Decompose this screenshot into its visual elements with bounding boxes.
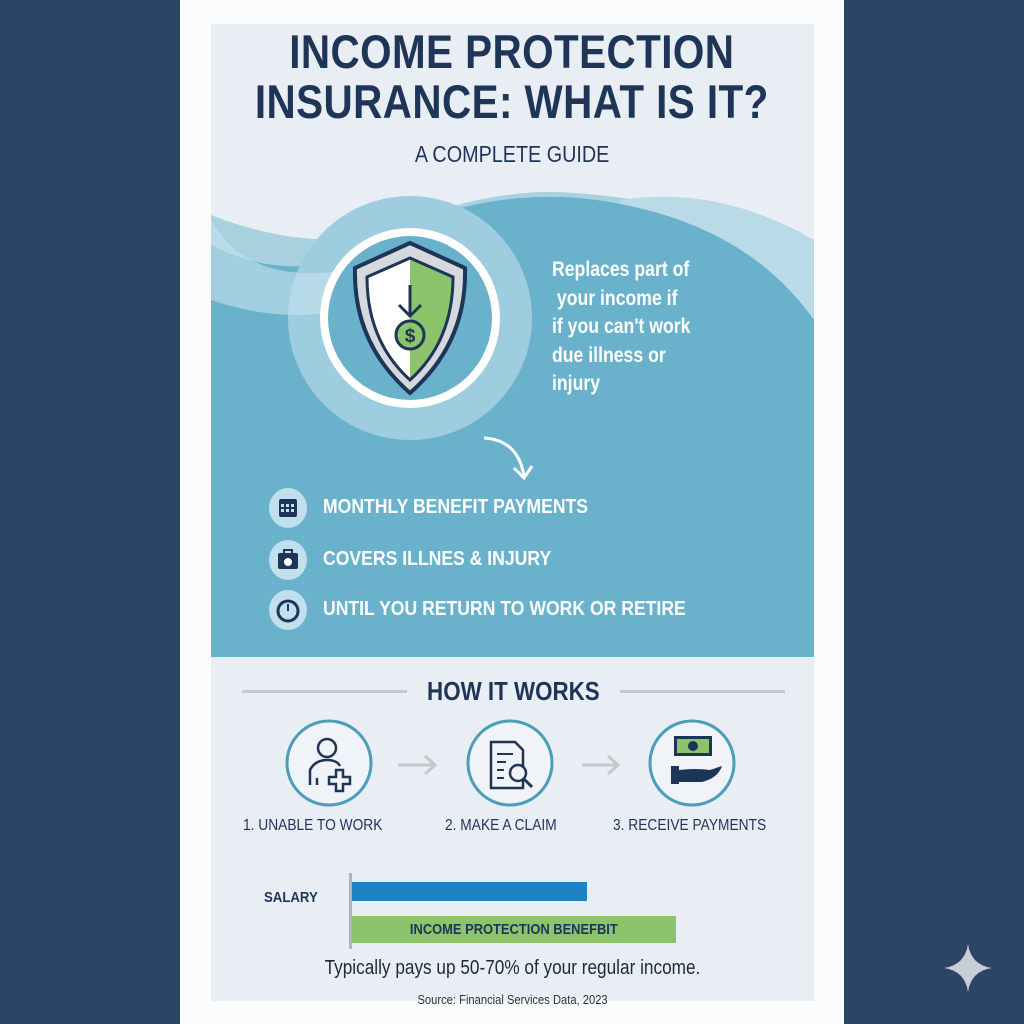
icon: shield: $ bbox=[405, 326, 416, 347]
white card bbox=[180, 0, 844, 1024]
text: description: Replaces part of bbox=[552, 258, 689, 281]
bar chart bbox=[264, 873, 676, 949]
arrow: curved bbox=[484, 436, 534, 480]
step labels: 2. MAKE A CLAIM bbox=[445, 817, 557, 834]
text: description: injury bbox=[552, 372, 600, 395]
caption: Typically pays up 50-70% of your regular income. bbox=[325, 957, 700, 979]
step 1 icon bbox=[287, 721, 371, 805]
text: description: due illness or bbox=[552, 344, 666, 366]
item: covers: COVERS ILLNES & INJURY bbox=[323, 548, 551, 570]
bar chart: INCOME PROTECTION BENEFBIT bbox=[410, 921, 618, 938]
item: monthly bbox=[269, 488, 588, 528]
title: INCOME PROTECTION bbox=[289, 25, 735, 78]
step labels bbox=[243, 817, 766, 834]
source: Source: Financial Services Data, 2023 bbox=[417, 992, 608, 1007]
text: description bbox=[552, 258, 690, 395]
steps bbox=[243, 720, 766, 834]
item: until bbox=[269, 590, 686, 630]
step labels: 1. UNABLE TO WORK bbox=[243, 817, 382, 834]
icon: shield bbox=[320, 228, 500, 408]
item: until: UNTIL YOU RETURN TO WORK OR RETIRE bbox=[323, 598, 686, 620]
title: INSURANCE: WHAT IS IT? bbox=[255, 75, 769, 128]
icon: sparkle bbox=[944, 944, 992, 992]
subtitle: A COMPLETE GUIDE bbox=[415, 141, 609, 167]
text: description: your income if bbox=[557, 286, 677, 310]
title bbox=[255, 25, 769, 128]
feature list bbox=[269, 488, 686, 630]
step 3 icon bbox=[650, 721, 734, 805]
item: covers bbox=[269, 540, 551, 580]
heading: how it works: HOW IT WORKS bbox=[427, 676, 600, 706]
step labels: 3. RECEIVE PAYMENTS bbox=[613, 817, 766, 834]
heading: how it works bbox=[242, 676, 785, 706]
step 2 icon bbox=[468, 721, 552, 805]
item: monthly: MONTHLY BENEFIT PAYMENTS bbox=[323, 496, 588, 518]
inner panel bbox=[211, 24, 814, 1001]
wave background bbox=[211, 192, 814, 657]
bar chart: SALARY bbox=[264, 889, 318, 906]
text: description: if you can't work bbox=[552, 315, 690, 338]
